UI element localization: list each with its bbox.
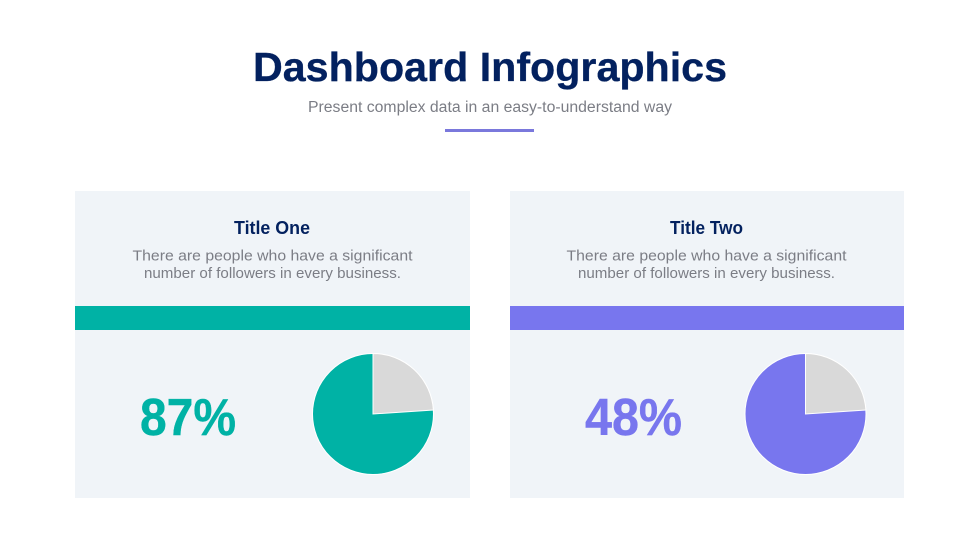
panel description: There are people who have a significant <box>566 248 847 264</box>
subtitle: Present complex data in an easy-to-understand way <box>308 99 672 116</box>
title: Dashboard Infographics <box>253 44 727 90</box>
panel background <box>510 191 904 498</box>
colored band <box>510 306 904 330</box>
colored band <box>75 306 470 330</box>
panel heading: Title One <box>234 218 310 238</box>
panel background <box>75 191 470 498</box>
panel description: number of followers in every business. <box>578 265 835 282</box>
panel heading: Title Two <box>670 218 743 238</box>
title accent line <box>445 129 534 132</box>
panel description <box>566 248 847 282</box>
panel description: number of followers in every business. <box>144 265 401 282</box>
panel description <box>132 248 413 282</box>
panel: title two <box>510 191 904 498</box>
pie chart <box>312 353 434 474</box>
pie chart <box>745 354 866 474</box>
percentage value: 87% <box>140 389 236 447</box>
panel: title one <box>75 191 470 498</box>
panel description: There are people who have a significant <box>132 248 413 264</box>
percentage value: 48% <box>585 389 682 447</box>
